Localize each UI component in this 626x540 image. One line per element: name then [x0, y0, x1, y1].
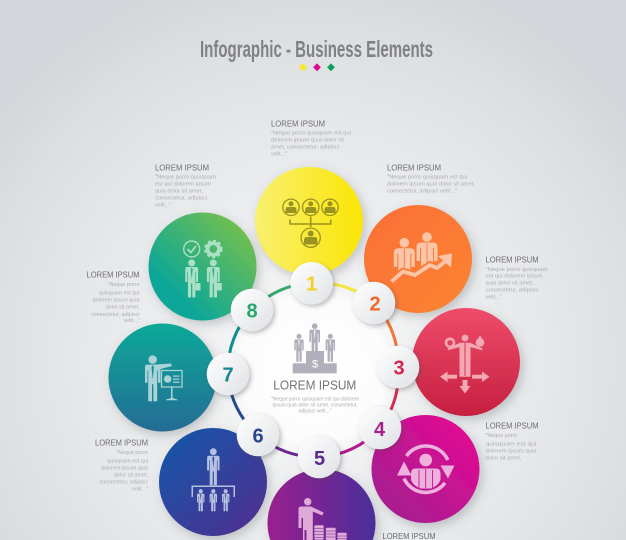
- text block 2: dolorem ipsum quia dolor sit amet,: [387, 181, 476, 187]
- text block 8: est qui dolorem ipsum: [155, 182, 212, 188]
- number badge 5: [298, 436, 340, 478]
- icon: presenter with board: [145, 355, 182, 401]
- text block 3: est qui dolorem ipsum: [486, 274, 543, 280]
- panel 6: navy circle: [159, 428, 267, 536]
- text block 4: dolor sit amet,: [486, 455, 522, 461]
- title: Infographic - Business Elements: [200, 36, 433, 62]
- ring segment: teal: [228, 310, 252, 374]
- icon: team hierarchy: [283, 199, 338, 247]
- text block 7: dolor sit amet,: [106, 305, 140, 311]
- text block 2: LOREM IPSUM: [387, 162, 441, 172]
- text block 6: "Neque porro: [116, 450, 148, 456]
- number badge 7: [207, 353, 249, 395]
- ring segment: orange: [374, 303, 398, 367]
- text block 7: "Neque porro: [108, 282, 140, 288]
- text block 6: quisquam est qui: [107, 459, 148, 465]
- number badge 2: 2: [369, 294, 381, 316]
- text block 8: "Neque porro quisquam: [155, 175, 217, 181]
- panel 7: teal circle: [108, 324, 216, 432]
- ring segment: red: [380, 367, 398, 428]
- number badge 8: [231, 289, 273, 331]
- panel 8: green circle: [148, 212, 256, 320]
- text block 2: [387, 162, 476, 194]
- number badge 2: [353, 282, 395, 324]
- number badge 4: [359, 407, 401, 449]
- ring segment: navy: [228, 374, 258, 435]
- panel 4: magenta circle: [372, 415, 480, 523]
- text block 8: consectetur, adipisci: [155, 196, 207, 202]
- ring segment: purple: [258, 435, 319, 457]
- title: [200, 36, 433, 71]
- number badge 3: [377, 346, 419, 388]
- text block 1: "Neque porro quisquam est qui: [271, 130, 351, 136]
- icon: businessmen with gear and check: [184, 241, 222, 297]
- text block 6: dolor sit amet,: [114, 473, 148, 479]
- text block 3: velit...": [486, 295, 502, 301]
- panel 3: red circle: [412, 308, 520, 416]
- text block 6: dolorem ipsum quia: [101, 466, 148, 472]
- text block 6: velit...": [132, 486, 148, 492]
- text block 1: dolorem ipsum quia dolor sit: [271, 138, 345, 144]
- number badge 6: [237, 414, 279, 456]
- number badge 4: 4: [374, 419, 386, 441]
- icon: podium: [293, 323, 337, 373]
- text block 4: "Neque porro: [486, 433, 517, 439]
- icon: organisation chart: [192, 448, 235, 511]
- central text: adipisci velit...": [299, 408, 332, 414]
- text block 7: quisquam est qui: [99, 291, 140, 297]
- text block 1: LOREM IPSUM: [271, 118, 325, 128]
- central text: ipsum quia dolor sit amet, consectetur,: [272, 402, 358, 408]
- text block 7: [86, 269, 140, 324]
- text block 3: consectetur, adipisci: [486, 288, 538, 294]
- icon: podium: $: [312, 358, 318, 370]
- text block 7: consectetur, adipisci: [91, 312, 140, 318]
- number badge 8: 8: [246, 300, 258, 322]
- number badge 1: 1: [306, 274, 317, 296]
- icon: growth team: [392, 232, 452, 282]
- text block 7: dolorem ipsum quia: [92, 297, 140, 303]
- text block 3: quia dolor sit amet,: [486, 281, 534, 287]
- text block 8: LOREM IPSUM: [155, 162, 209, 172]
- icon: person cycle: [397, 446, 454, 492]
- ring segment: yellow: [312, 283, 374, 303]
- text block 3: [486, 254, 548, 301]
- number badge 1: [290, 262, 333, 305]
- text block 2: consectetur, adipisci velit...": [387, 188, 457, 194]
- icon: decision arrows: [440, 335, 490, 394]
- text block 4: quisquam est qui: [486, 441, 536, 447]
- text block 4: LOREM IPSUM: [486, 420, 539, 430]
- text block 1: [271, 118, 351, 157]
- number badge 5: 5: [314, 448, 325, 470]
- text block 6: consectetur, adipisci: [99, 480, 148, 486]
- number badge 6: 6: [252, 426, 264, 448]
- panel 2: orange circle: [364, 205, 472, 313]
- central panel: [227, 283, 399, 457]
- central text: [271, 396, 359, 414]
- text block 1: amet, consectetur, adipisci: [271, 144, 339, 150]
- text block 1: velit...": [271, 151, 287, 157]
- number badge 7: 7: [222, 364, 234, 386]
- text block 8: velit...": [155, 202, 171, 208]
- panel 5: purple circle: [268, 469, 376, 540]
- ring segment: magenta: [319, 428, 380, 457]
- text block 8: [155, 162, 217, 208]
- central text: "Neque porro quisquam est qui dolorem: [271, 396, 359, 402]
- text block 7: velit...": [124, 318, 140, 324]
- ring segment: green: [252, 283, 312, 310]
- text block 3: "Neque porro quisquam: [486, 267, 548, 273]
- text block 6: LOREM IPSUM: [95, 437, 148, 447]
- icon: person with coins: [298, 498, 347, 540]
- text block 3: LOREM IPSUM: [486, 254, 539, 264]
- text block 8: quia dolor sit amet,: [155, 189, 204, 195]
- text block 4: [486, 420, 539, 461]
- panel 1: yellow circle: [255, 167, 363, 275]
- text block 4: dolorem ipsum quia: [486, 448, 536, 454]
- text block 6: [95, 437, 148, 492]
- number badge 3: 3: [393, 358, 405, 380]
- central heading: LOREM IPSUM: [273, 378, 356, 392]
- text block 2: "Neque porro quisquam est qui: [387, 174, 467, 180]
- text block 7: LOREM IPSUM: [86, 269, 140, 279]
